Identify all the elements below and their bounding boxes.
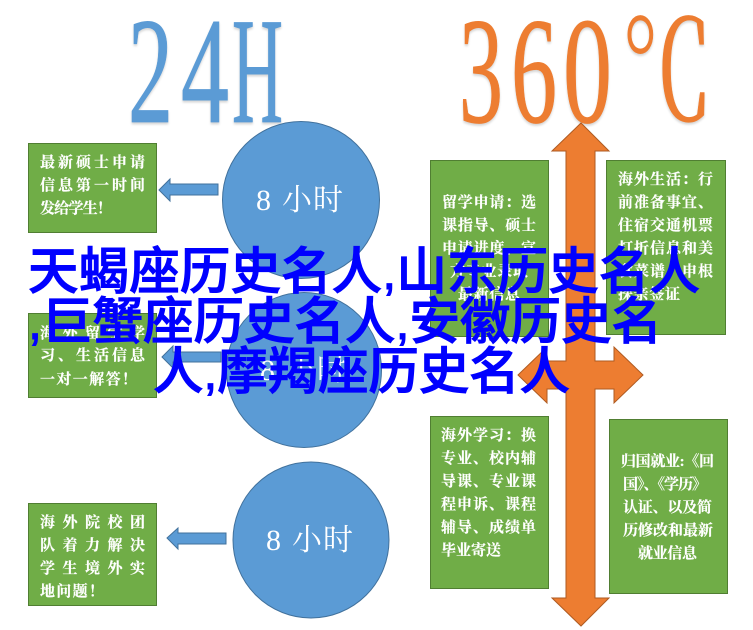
- box: overseas study: 程申诉、课程: [441, 495, 536, 513]
- box: overseas life: 前准备事宜、: [618, 193, 713, 211]
- box: overseas life: 打折信息和美: [618, 239, 713, 257]
- box: study application: [430, 160, 548, 336]
- box: returning employment: [610, 420, 728, 594]
- arrow: middle left: [162, 346, 221, 368]
- circle: top: 小时: [282, 184, 343, 217]
- box: bottom left green: 队着力解决: [40, 536, 145, 554]
- circle: bottom: [233, 462, 389, 618]
- box: returning employment: 归国就业:《回: [621, 452, 714, 470]
- box: overseas life: 探亲签证: [618, 285, 680, 303]
- box: study application: 留学申请：选: [442, 193, 536, 211]
- circle: middle: 小时: [286, 354, 347, 387]
- box: returning employment: 国》、《学历》: [623, 476, 707, 493]
- box: study application: 课指导、硕士: [442, 216, 536, 234]
- box: returning employment: 认证、以及简: [623, 498, 712, 516]
- box: top left green: [28, 144, 156, 232]
- circle: bottom: 8: [266, 524, 281, 557]
- box: study application: 申请进度、宣: [442, 239, 536, 257]
- circle: top: 8: [256, 184, 271, 217]
- box: returning employment: 就业信息: [638, 544, 698, 562]
- box: overseas study: 辅导、成绩单: [441, 518, 536, 536]
- box: middle left green: 海外留学学: [40, 324, 145, 342]
- heading: 24H: [128, 0, 283, 155]
- box: middle left green: 一对一解答！: [40, 370, 137, 388]
- arrow: top left: [159, 179, 218, 201]
- box: study application: 最新信息: [458, 285, 521, 303]
- circle: middle: 8: [260, 354, 275, 387]
- box: bottom left green: 学生境外实: [40, 560, 146, 577]
- box: bottom left green: 海外院校团: [40, 513, 145, 531]
- arrow: orange four-way: [518, 123, 643, 626]
- box: overseas study: 毕业寄送: [441, 541, 501, 559]
- overlay title text: 天蝎座历史名人,山东历史名人: [28, 243, 700, 300]
- overlay title text: [28, 243, 700, 400]
- arrow: bottom left: [167, 528, 226, 549]
- box: returning employment: 历修改和最新: [623, 521, 713, 539]
- circle: top: [222, 122, 380, 278]
- box: overseas life: [606, 160, 726, 334]
- box: middle left green: [28, 314, 156, 398]
- box: top left green: 信息第一时间: [40, 176, 145, 194]
- box: top left green: 最新硕士申请: [40, 153, 145, 171]
- box: overseas study: 海外学习：换: [441, 426, 536, 444]
- box: overseas life: 住宿交通机票: [618, 216, 713, 234]
- box: overseas study: 专业、校内辅: [441, 449, 536, 467]
- box: middle left green: 习、生活信息: [40, 346, 146, 364]
- box: study application: 方专业录取: [450, 262, 528, 280]
- box: top left green: 发给学生！: [40, 199, 112, 217]
- box: bottom left green: [28, 504, 156, 606]
- heading: 360°C: [459, 0, 713, 155]
- box: overseas study: 导课、专业课: [441, 472, 536, 490]
- box: overseas life: 海外生活：行: [618, 170, 713, 188]
- overlay title text: 人,摩羯座历史名人: [153, 343, 570, 400]
- circle: middle: [226, 292, 382, 448]
- overlay title text: ,巨蟹座历史名人,安徽历史名: [28, 293, 662, 350]
- circle: bottom: 小时: [292, 524, 353, 557]
- box: overseas study: [430, 416, 548, 588]
- box: overseas life: 食菜谱、申根: [618, 262, 713, 280]
- box: bottom left green: 地问题！: [40, 582, 104, 600]
